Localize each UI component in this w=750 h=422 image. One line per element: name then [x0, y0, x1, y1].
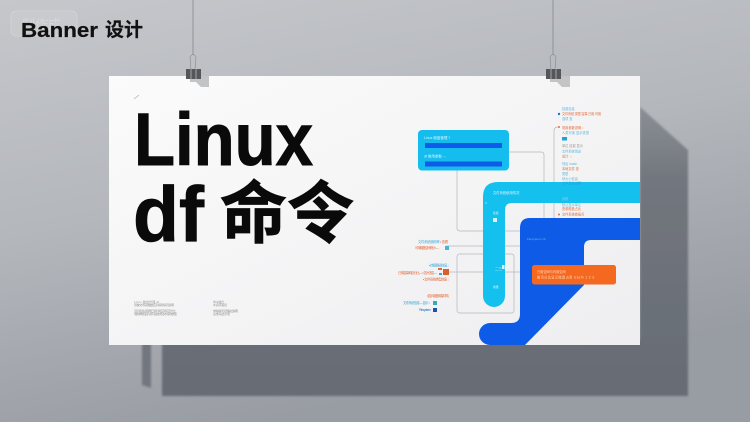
left annotation column: 文件系统使用率 • 查看: [418, 239, 449, 244]
right annotation column: 文件系统 类型 容量 已用 可用: [562, 111, 601, 116]
blue ribbon label: Filesystem 1K: [527, 237, 546, 241]
connector lines: [446, 127, 560, 313]
footer notes: 参考资料与示例输出说明: [213, 308, 238, 313]
ribbon labels: 挂载: [493, 211, 499, 215]
title: df: [133, 170, 205, 258]
clip shadow left: [190, 76, 209, 87]
poster shadow: [142, 107, 688, 396]
top cyan card: Linux 磁盘管理 ?: [424, 135, 450, 140]
ribbon labels: 二三: [495, 267, 502, 271]
heading: Banner 设计: Banner: [21, 20, 98, 42]
right annotation column: 常用参数说明 ↕: [562, 125, 584, 130]
small mark: [134, 95, 139, 99]
right annotation column: [558, 106, 601, 216]
footer notes: 查看文件系统磁盘空间使用情况说明: [134, 302, 174, 307]
right annotation column: 文件系统信息: [562, 148, 581, 154]
left annotation column: • 挂载路径信息 ↕: [429, 262, 449, 268]
right annotation column: 查看磁盘占比: [562, 206, 581, 211]
top cyan card: df 常用参数 ↔: [424, 154, 446, 158]
orange callout: [532, 265, 616, 284]
title: Linux: [134, 98, 313, 181]
footer notes: 运维基础手册: [213, 311, 230, 316]
right annotation column: 人类可读 显示类型: [562, 130, 590, 135]
left annotation column: Filesystem: [419, 308, 431, 312]
blue ribbon: [479, 218, 640, 345]
ribbon labels: 文件系统使用情况: [493, 190, 520, 195]
heading: Banner 设计: 设计: [105, 19, 143, 41]
hanging wire left: [192, 0, 194, 55]
heading: Banner 设计: 制作成: [22, 17, 61, 32]
left annotation column: [398, 239, 450, 312]
right annotation column: 文件系统挂载点: [562, 212, 585, 216]
cyan ribbon: [483, 182, 640, 307]
ribbon labels: 容量: [493, 285, 499, 289]
title: [133, 98, 354, 258]
poster: [109, 76, 640, 345]
orange callout: 已用空间与可用空间: [537, 269, 566, 274]
binder clip right: [546, 54, 561, 79]
binder clip left: [186, 54, 201, 79]
right annotation column: 默认显示单位: [562, 202, 582, 207]
right annotation column: 单位 挂载 显示: [562, 143, 583, 148]
left annotation column: • 显示磁盘用量详情: [427, 293, 450, 298]
clip shadow right: [550, 76, 570, 87]
right annotation column: 总计 ↔: [562, 154, 572, 158]
left annotation column: 已用容量和百分比 — ↕ 总计信息 —: [398, 270, 438, 275]
orange callout: 按百分比显示磁盘占用 Use% 1 2 3: [537, 274, 594, 280]
right annotation column: 参数: [562, 196, 569, 201]
footer notes: 命令格式: [213, 299, 224, 304]
right annotation column: 文件系统说明: [562, 180, 581, 186]
right annotation column: 列出 inode: [562, 161, 577, 166]
left annotation column: 文件系统信息 — 显示 ↕: [403, 300, 430, 305]
hanging wire right: [552, 0, 554, 55]
footer notes: Linux 磁盘管理 df: [134, 299, 159, 304]
title: 命令: [220, 177, 354, 252]
top cyan card: [418, 130, 509, 170]
footer notes: [134, 299, 238, 316]
footer notes: 显示挂载点容量已用可用空间及百分比: [134, 308, 176, 313]
heading: Banner 设计: [11, 11, 143, 42]
footer notes: df 选项 路径: [213, 302, 227, 307]
left annotation column: • 文件系统类型信息 ↕: [423, 276, 449, 282]
right annotation column: 本地文件 查: [562, 166, 580, 171]
right annotation column: 块大小信息: [562, 176, 578, 181]
right annotation column: 选项 查: [562, 116, 573, 121]
right annotation column: 挂载信息: [562, 106, 575, 111]
ribbon labels: [485, 190, 520, 289]
left annotation column: 可用磁盘空间统计 ↕ —: [415, 245, 440, 250]
footer notes: 常用参数包括人类可读格式和文件系统类型: [134, 311, 177, 316]
right annotation column: 类型: [562, 171, 569, 176]
